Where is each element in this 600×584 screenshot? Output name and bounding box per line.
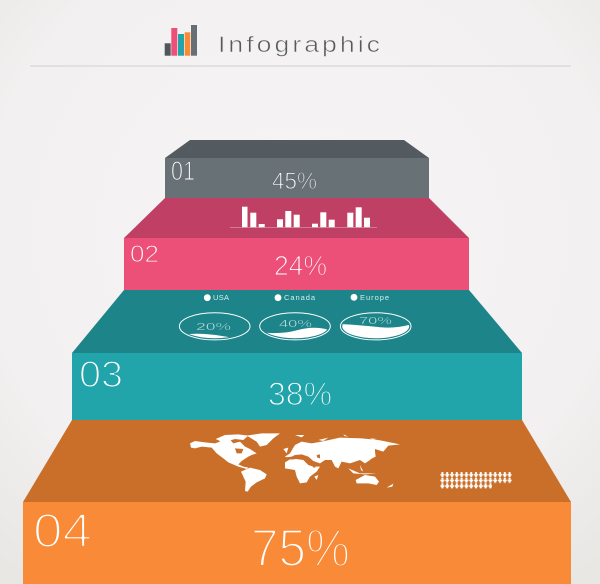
step 2 number: 02: [130, 241, 159, 268]
world map: [190, 433, 400, 492]
step 2: pink: [124, 198, 469, 290]
legend: USA: USA: [213, 293, 229, 302]
title: Infographic: [218, 32, 383, 57]
gauge 20%: 20%: [196, 322, 231, 333]
gauge 40%: 40%: [279, 319, 312, 330]
header logo: bar icon: [165, 25, 197, 56]
step 3 percentage: 38%: [268, 376, 332, 412]
step 4 percentage: 75%: [251, 519, 350, 578]
step 3 number: 03: [79, 354, 123, 395]
eurasia africa oceania: [285, 434, 400, 488]
legend: Europe: Europe: [360, 293, 389, 302]
step 4: orange: [23, 420, 571, 584]
step 1: grey: [165, 140, 429, 198]
gauge 70%: 70%: [359, 316, 392, 327]
step 4 number: 04: [33, 505, 92, 558]
gauge 70%: [340, 312, 412, 340]
gauge 40%: [259, 312, 331, 340]
step 2 bar chart: [230, 207, 377, 228]
legend: USA: [204, 293, 229, 302]
step 1 percentage: 45%: [272, 168, 317, 195]
americas: [190, 433, 288, 492]
legend: Canada: Canada: [284, 293, 316, 302]
step 3: teal: [72, 290, 522, 420]
gauge 20%: [178, 312, 250, 340]
step 2 percentage: 24%: [274, 250, 327, 281]
step 1 number: 01: [171, 156, 195, 186]
people pictogram: [440, 472, 512, 489]
